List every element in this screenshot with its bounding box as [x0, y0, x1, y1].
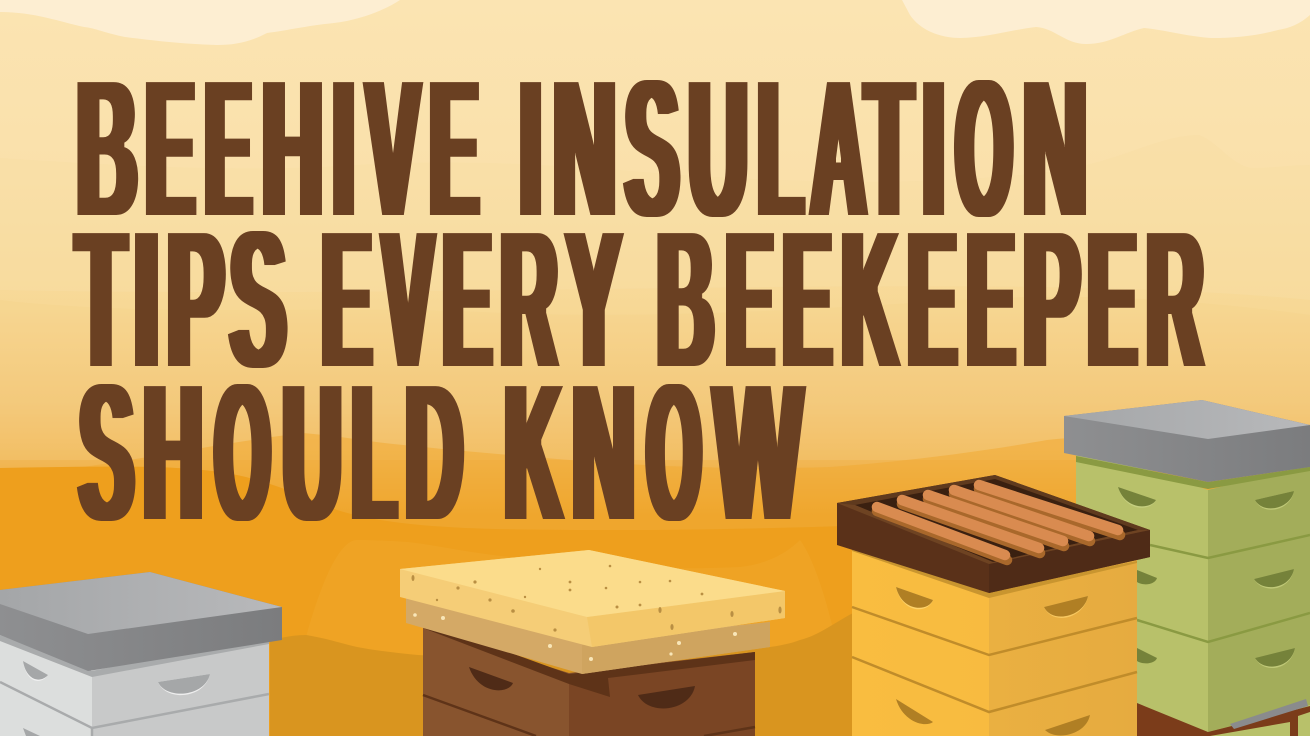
icon: yellow hive with top bars [837, 475, 1150, 736]
title line 2: T [76, 189, 126, 411]
title line 2: K [842, 189, 898, 411]
title line 1: V [366, 38, 420, 260]
title line 1: N [553, 38, 616, 260]
title line 1: T [866, 38, 912, 260]
title: W [714, 342, 802, 564]
title line 1: I [520, 38, 541, 260]
title: N [1023, 38, 1087, 260]
title line 2: V [382, 189, 434, 411]
title line 1: I [333, 38, 354, 260]
foam upper layer [400, 550, 785, 647]
title line 1: E [430, 38, 478, 260]
title line 2: E [322, 189, 371, 411]
stand [1137, 703, 1310, 736]
foam lower layer [406, 598, 770, 674]
title line 1: B [77, 38, 137, 260]
frame [837, 475, 1150, 593]
title line 2: E [967, 189, 1014, 411]
title line 1: A [811, 38, 866, 260]
roof [0, 572, 282, 671]
title [76, 38, 1203, 564]
title line 1: O [956, 38, 1012, 260]
title line 3: U [283, 342, 341, 564]
title line 3: N [572, 342, 635, 564]
title line 2: P [167, 189, 224, 411]
title line 2: Y [566, 189, 620, 411]
title line 3: O [647, 342, 701, 564]
handles [1118, 487, 1156, 508]
pale foam dots [413, 613, 737, 661]
title line 2: P [1023, 189, 1080, 411]
title line 2: S [230, 189, 286, 411]
title line 2: E [908, 189, 956, 411]
title line 1: E [205, 38, 251, 260]
title line 2: E [443, 189, 491, 411]
title line 3: D [406, 342, 463, 564]
title line 1: I [923, 38, 944, 260]
handles [23, 661, 48, 681]
title line 2: I [134, 189, 159, 411]
handles [896, 587, 933, 609]
title line 2: B [657, 189, 714, 411]
icon: green hive with grey roof [1064, 400, 1310, 736]
title line 1: S [625, 38, 679, 260]
text: R [1147, 189, 1203, 411]
title line 3: O [215, 342, 270, 564]
title line 3: S [79, 342, 134, 564]
title line 2: E [783, 189, 831, 411]
roof [1064, 400, 1310, 482]
foam specks [412, 565, 782, 632]
title line 2: R [501, 189, 557, 411]
title line 3: H [144, 342, 202, 564]
title line 1: U [689, 38, 747, 260]
top bars [877, 485, 1120, 560]
title line 1: H [262, 38, 323, 260]
icon: white hive with grey roof [0, 572, 282, 736]
title line 1: L [758, 38, 803, 260]
handles [469, 667, 513, 690]
title line 2: E [1088, 189, 1136, 411]
title line 3: L [352, 342, 396, 564]
icon: brown hive with foam insulation [400, 550, 785, 736]
title line 1: E [146, 38, 194, 260]
title line 2: E [726, 189, 773, 411]
title line 3: K [505, 342, 562, 564]
